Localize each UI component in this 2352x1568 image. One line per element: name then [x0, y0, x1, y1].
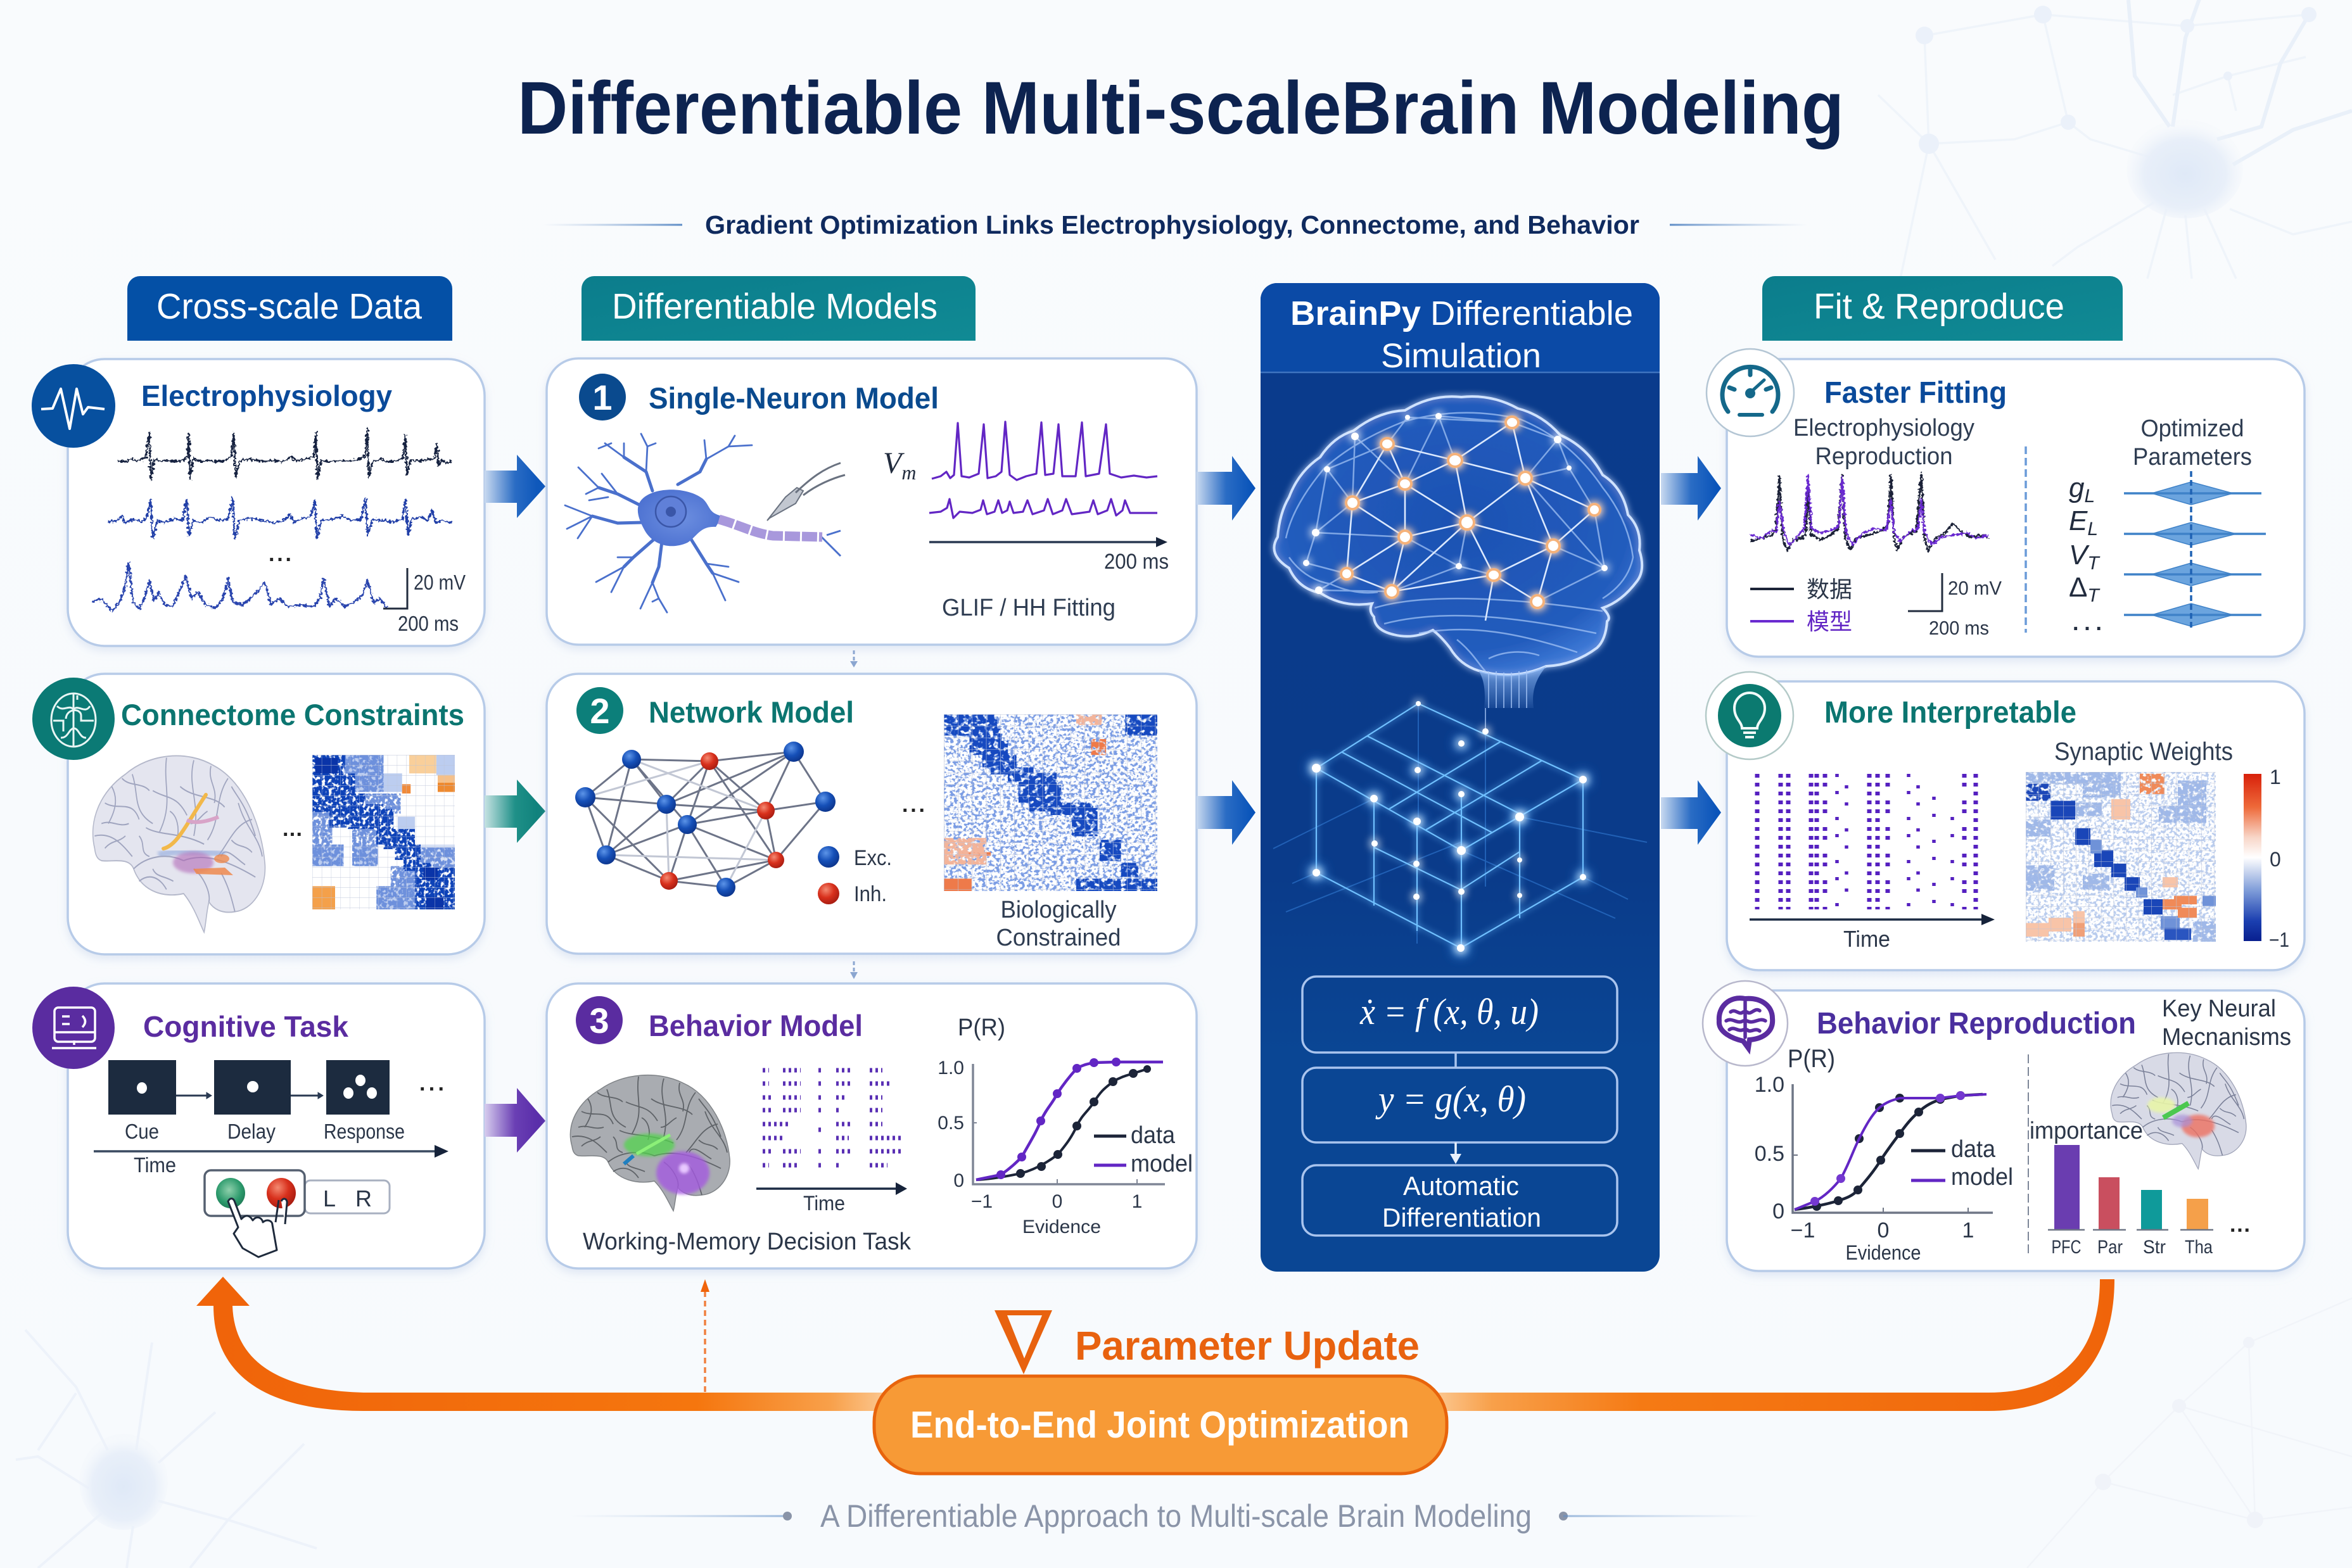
heading: Cognitive Task — [143, 1010, 348, 1043]
time axis — [756, 1182, 907, 1215]
parameter labels: T — [2087, 553, 2101, 574]
icon: task screen — [32, 987, 115, 1069]
color bar: 1 — [2270, 766, 2281, 788]
panel: More Interpretable — [1706, 672, 2304, 970]
membrane potential traces — [929, 422, 1157, 518]
trace: blue spikes — [108, 498, 452, 539]
panel: Network Model — [547, 674, 1197, 954]
legend — [818, 846, 892, 906]
small brain — [2111, 1053, 2246, 1169]
equation box: output — [1302, 1068, 1617, 1142]
importance bar chart — [2048, 1145, 2250, 1258]
panel: Connectome Constraints — [32, 674, 485, 954]
stage labels: Response — [324, 1120, 405, 1143]
constrained matrix — [944, 714, 1157, 891]
panel: BrainPy Differentiable Simulation — [1261, 283, 1660, 1272]
equation box: output: y = g(x, θ) — [1375, 1078, 1526, 1120]
badge 1 — [579, 374, 626, 420]
response keys L R: L — [323, 1185, 336, 1211]
stage labels — [125, 1120, 405, 1143]
panel: Single-Neuron Model — [547, 358, 1197, 645]
heading: More Interpretable — [1824, 696, 2076, 730]
subheading — [2162, 996, 2291, 1051]
connector arrow 2 to 3 — [850, 961, 858, 979]
parameter labels: ... — [2073, 611, 2102, 635]
scale bar — [383, 568, 466, 635]
psychometric chart — [1755, 1045, 2013, 1264]
subheading right: Optimized — [2141, 415, 2244, 442]
subtitle: Gradient Optimization Links Electrophysiology, Connectome, and Behavior — [705, 210, 1639, 239]
header band: BrainPy Differentiable — [1290, 294, 1633, 332]
footer line — [570, 1498, 1761, 1534]
caption: Constrained — [996, 925, 1121, 951]
stimulus: delay — [214, 1060, 291, 1115]
color bar: −1 — [2269, 928, 2289, 951]
header band — [1261, 283, 1660, 375]
glowing brain — [1274, 396, 1642, 731]
arrow: data to models 2 — [485, 780, 545, 843]
arrow: data to models 3 — [485, 1088, 545, 1153]
psychometric chart: 0.5 — [1755, 1142, 1784, 1166]
panel: Behavior Model — [547, 983, 1197, 1268]
dashed feedback arrow to behavior model — [701, 1279, 709, 1392]
response keys L R — [305, 1180, 390, 1213]
dashed divider — [2025, 446, 2027, 633]
psychometric chart: 0.5 — [938, 1113, 964, 1134]
automatic differentiation box: Automatic — [1403, 1171, 1519, 1201]
response keys L R: R — [355, 1185, 372, 1211]
column header: Cross-scale Data: Cross-scale Data — [156, 286, 422, 327]
arrow: simulation to results 1 — [1661, 456, 1721, 521]
pill: end-to-end joint optimization — [874, 1376, 1447, 1474]
time axis: Time — [803, 1192, 845, 1215]
psychometric chart: 1 — [1132, 1191, 1142, 1212]
subheading left: Electrophysiology — [1793, 415, 1974, 441]
brain with highlighted tracts — [93, 756, 265, 932]
psychometric chart: data — [1131, 1122, 1176, 1149]
legend: Exc. — [854, 846, 892, 870]
psychometric chart: 0 — [953, 1170, 964, 1191]
caption: GLIF / HH Fitting — [942, 595, 1116, 621]
parameter labels — [2069, 472, 2102, 635]
equation box: state — [1302, 977, 1617, 1053]
pill: end-to-end joint optimization: End-to-End Joint Optimization — [910, 1404, 1409, 1446]
ellipsis: ... — [902, 793, 925, 817]
posterior violins — [2124, 471, 2266, 631]
color bar — [2244, 766, 2289, 951]
panel: Cognitive Task — [32, 983, 485, 1268]
parameter labels: L — [2084, 486, 2095, 507]
psychometric chart: model — [1131, 1151, 1193, 1177]
time axis — [94, 1145, 448, 1177]
trace legend: 模型 — [1807, 609, 1852, 635]
arrow: simulation to results 2 — [1661, 780, 1721, 845]
psychometric chart: P(R) — [958, 1015, 1005, 1041]
stage labels: Cue — [125, 1120, 159, 1143]
heading: Connectome Constraints — [121, 698, 464, 731]
trace: black spikes — [118, 428, 452, 481]
header band: Simulation — [1381, 337, 1541, 375]
psychometric chart: data — [1951, 1136, 1996, 1163]
time axis: Time — [1843, 926, 1890, 952]
panel: Behavior Reproduction — [1703, 981, 2304, 1271]
subheading left — [1793, 415, 1974, 470]
column header: Differentiable Models: Differentiable Models — [612, 286, 938, 327]
connectivity matrix — [312, 755, 455, 909]
badge 3: 3 — [589, 1001, 609, 1040]
stimulus: cue — [108, 1060, 176, 1115]
neuron illustration — [565, 434, 845, 612]
sequence arrows — [176, 1092, 323, 1099]
stage labels: Delay — [227, 1120, 276, 1143]
connector arrow 1 to 2 — [850, 650, 858, 667]
ellipsis: ... — [269, 542, 291, 566]
ellipsis: ... — [283, 817, 302, 841]
trace legend: 数据 — [1807, 576, 1852, 602]
badge 3 — [576, 996, 623, 1044]
label: importance: importance — [2030, 1118, 2143, 1144]
time axis — [929, 537, 1169, 574]
arrow: data to models 1 — [485, 455, 545, 518]
scale bar: 20 mV — [414, 571, 466, 594]
importance bar chart: Str — [2143, 1237, 2166, 1258]
scale bar: 200 ms — [1929, 617, 1989, 639]
psychometric chart: 1 — [1962, 1218, 1974, 1242]
badge 2: 2 — [590, 691, 610, 731]
caption: Biologically — [1001, 897, 1116, 923]
parameter labels: V — [2069, 540, 2087, 571]
heading: Single-Neuron Model — [649, 381, 939, 415]
heading: Behavior Reproduction — [1817, 1007, 2136, 1040]
subheading left: Reproduction — [1815, 443, 1952, 470]
caption: Working-Memory Decision Task — [583, 1229, 912, 1255]
importance bar chart: Par — [2097, 1237, 2123, 1258]
icon: gauge — [1707, 349, 1794, 436]
ellipsis: ... — [419, 1072, 444, 1096]
feedback arrow: left branch — [196, 1277, 887, 1411]
title: Differentiable Multi-scaleBrain Modeling — [518, 66, 1844, 150]
icon: brain — [32, 678, 115, 760]
color bar: 0 — [2270, 848, 2281, 871]
psychometric chart — [938, 1015, 1193, 1237]
badge 1: 1 — [592, 377, 613, 417]
trace: noisy blue — [92, 563, 386, 611]
equation box: state: ẋ = f (x, θ, u) — [1359, 991, 1539, 1032]
time axis: Time — [134, 1153, 176, 1177]
heading: Network Model — [649, 695, 854, 729]
label: Synaptic Weights — [2054, 738, 2233, 766]
trace legend — [1750, 576, 1852, 635]
psychometric chart: 1.0 — [938, 1058, 964, 1078]
psychometric chart: 0 — [1052, 1191, 1062, 1212]
panel: Electrophysiology — [32, 359, 485, 646]
label: parameter update: Parameter Update — [1075, 1323, 1420, 1369]
synaptic weight matrix — [2026, 772, 2216, 942]
feedback arrow: right branch — [1438, 1279, 2114, 1411]
arrow: models to simulation 2 — [1197, 780, 1255, 845]
psychometric chart: −1 — [1791, 1218, 1815, 1242]
heading: Behavior Model — [649, 1009, 863, 1042]
subheading: Key Neural — [2162, 996, 2276, 1022]
panel: Faster Fitting — [1707, 349, 2304, 657]
footer line: A Differentiable Approach to Multi-scale Brain Modeling — [820, 1498, 1532, 1534]
network graph — [575, 742, 836, 897]
subheading right — [2133, 415, 2252, 471]
response buttons and hand — [205, 1170, 305, 1257]
subheading right: Parameters — [2133, 444, 2252, 471]
psychometric chart: P(R) — [1788, 1045, 1835, 1073]
spike raster — [763, 1070, 901, 1165]
psychometric chart: model — [1951, 1164, 2013, 1191]
importance bar chart: ... — [2230, 1213, 2250, 1237]
parameter labels: g — [2069, 472, 2084, 503]
parameter labels: L — [2087, 519, 2098, 540]
parameter labels: T — [2087, 585, 2101, 606]
Vm label: V — [883, 446, 901, 480]
subheading: Mecnanisms — [2162, 1024, 2291, 1051]
connector — [1454, 1053, 1457, 1068]
column header: Fit & Reproduce — [1762, 276, 2123, 341]
automatic differentiation box: Differentiation — [1382, 1203, 1541, 1232]
column header: Differentiable Models — [582, 276, 976, 341]
neural lattice cube — [1273, 701, 1647, 956]
icon: purple brain — [1703, 981, 1788, 1066]
importance bar chart: PFC — [2051, 1237, 2082, 1258]
icon: pulse — [32, 364, 115, 448]
stimulus: response — [326, 1060, 390, 1115]
psychometric chart: 0 — [1772, 1199, 1784, 1223]
badge 2 — [576, 687, 623, 734]
column header: Fit & Reproduce: Fit & Reproduce — [1814, 286, 2064, 327]
psychometric chart: Evidence — [1022, 1217, 1101, 1237]
Vm label: m — [901, 461, 916, 484]
arrow: models to simulation 1 — [1197, 456, 1255, 521]
brain with active regions — [570, 1075, 730, 1211]
column header: Cross-scale Data — [127, 276, 452, 341]
caption — [996, 897, 1121, 951]
parameter labels: E — [2069, 505, 2087, 536]
icon: lightbulb — [1706, 672, 1793, 759]
dashed divider — [2028, 1054, 2029, 1255]
automatic differentiation box — [1302, 1165, 1617, 1236]
scale bar: 200 ms — [398, 612, 459, 635]
importance bar chart: Tha — [2185, 1237, 2213, 1258]
heading: Electrophysiology — [141, 379, 392, 412]
time axis — [1750, 914, 1995, 952]
parameter labels: Δ — [2069, 572, 2087, 603]
psychometric chart: 0 — [1878, 1218, 1889, 1242]
heading: Faster Fitting — [1824, 376, 2007, 410]
reproduction traces — [1750, 474, 1988, 551]
arrow down — [1450, 1142, 1461, 1164]
psychometric chart: −1 — [971, 1191, 993, 1212]
time axis: 200 ms — [1104, 550, 1169, 574]
psychometric chart: Evidence — [1846, 1241, 1921, 1264]
brain stem — [1478, 666, 1546, 731]
nabla symbol — [995, 1310, 1052, 1374]
spike raster — [1757, 774, 1976, 909]
psychometric chart: 1.0 — [1755, 1073, 1784, 1097]
scale bar: 20 mV — [1948, 577, 2002, 599]
legend: Inh. — [854, 882, 887, 906]
scale bar — [1908, 573, 2002, 639]
